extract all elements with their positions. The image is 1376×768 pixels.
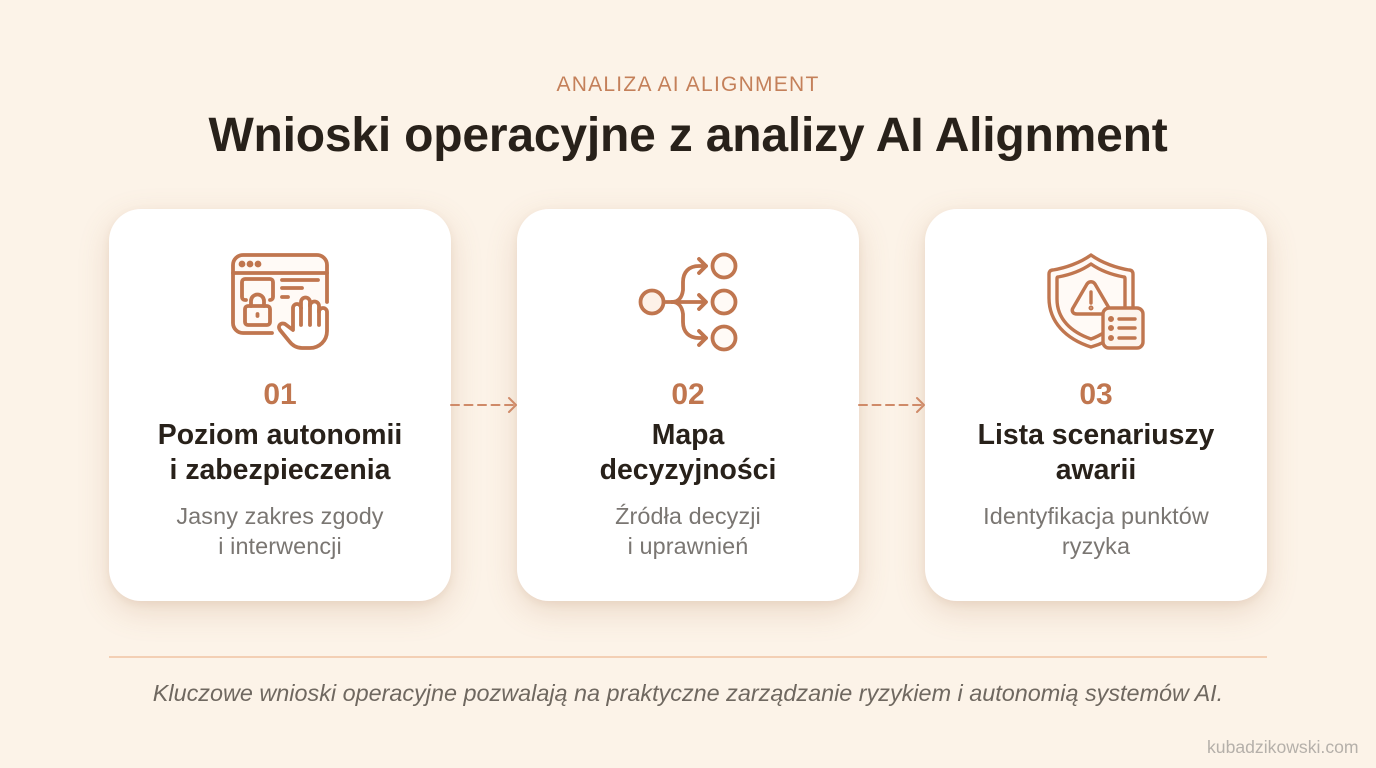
description: Identyfikacja punktów [983, 503, 1209, 529]
heading: Poziom autonomii [158, 419, 402, 451]
heading [600, 419, 776, 486]
panel: card 2 [517, 209, 859, 601]
description [615, 503, 761, 559]
arrow: card 2 to card 3 [858, 397, 925, 413]
icon: browser window with lock and hand [231, 253, 329, 350]
description [176, 503, 384, 559]
description: Jasny zakres zgody [176, 503, 384, 529]
heading: awarii [1056, 454, 1136, 486]
heading: i zabezpieczenia [170, 454, 390, 486]
heading: decyzyjności [600, 454, 776, 486]
heading: Mapa [652, 419, 724, 451]
eyebrow: ANALIZA AI ALIGNMENT [556, 73, 820, 96]
icon: shield with warning and list [1047, 253, 1145, 350]
description: i uprawnień [628, 533, 748, 559]
footer note: Kluczowe wnioski operacyjne pozwalają na praktyczne zarządzanie ryzykiem i autonomią systemów AI. [153, 680, 1223, 706]
description: i interwencji [218, 533, 342, 559]
description: ryzyka [1062, 533, 1130, 559]
description [983, 503, 1209, 559]
heading: Lista scenariuszy [978, 419, 1214, 451]
number 01: 01 [263, 378, 297, 411]
number 02: 02 [671, 378, 705, 411]
panel: card 3 [925, 209, 1267, 601]
watermark: kubadzikowski.com [1207, 737, 1359, 757]
title: Wnioski operacyjne z analizy AI Alignment [208, 109, 1168, 162]
panel: card 1 [109, 209, 451, 601]
description: Źródła decyzji [615, 503, 761, 529]
heading [978, 419, 1214, 486]
icon: decision map [638, 252, 738, 352]
arrow: card 1 to card 2 [450, 397, 517, 413]
number 03: 03 [1079, 378, 1113, 411]
heading [158, 419, 402, 486]
